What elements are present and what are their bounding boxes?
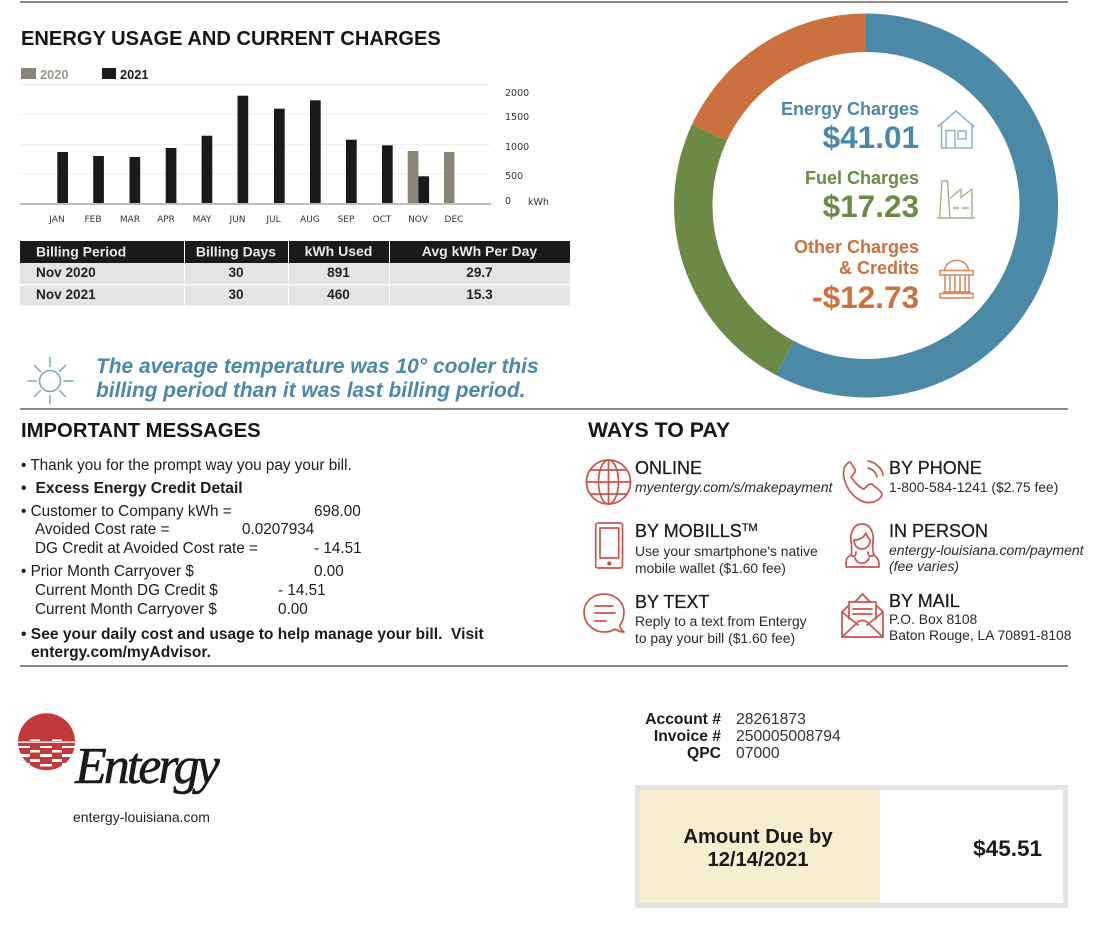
billing table: Avg kWh Per Day	[422, 243, 537, 259]
amount due box	[638, 788, 1066, 906]
fuel charges label: Fuel Charges	[805, 168, 919, 188]
other charges and credits label: & Credits	[839, 258, 919, 278]
pay in person: IN PERSON	[889, 521, 988, 541]
text block: important messages: • See your daily cost and usage to help manage your bill. Visit	[21, 626, 484, 643]
pay by mobills: Use your smartphone's native	[635, 543, 818, 559]
icon: envelope	[842, 594, 883, 637]
billing table: Nov 2021	[36, 287, 96, 302]
pay in person: (fee varies)	[889, 558, 959, 574]
bar chart: monthly kWh: 500	[505, 171, 523, 182]
bar chart: monthly kWh: JUN	[229, 215, 245, 225]
billing table: Billing Days	[196, 244, 276, 260]
icon: globe	[586, 460, 630, 504]
pay in person: entergy-louisiana.com/payment	[889, 542, 1085, 558]
fuel charges label: $17.23	[823, 188, 919, 224]
website url: entergy-louisiana.com	[73, 809, 210, 825]
billing table: 30	[228, 287, 244, 302]
pay online: myentergy.com/s/makepayment	[635, 479, 833, 495]
account details: 07000	[736, 745, 780, 762]
bar chart: monthly kWh: JUL	[265, 215, 281, 225]
entergy logo	[18, 713, 221, 795]
billing table	[20, 241, 570, 306]
bar chart: monthly kWh: FEB	[84, 215, 102, 225]
account details: QPC	[687, 745, 721, 762]
icon: sun	[28, 358, 73, 404]
account details: Account #	[645, 711, 721, 728]
other charges and credits label	[794, 237, 919, 315]
heading: important messages: IMPORTANT MESSAGES	[21, 420, 261, 442]
text block: important messages: Current Month Carryover $	[35, 601, 217, 618]
text block: important messages: 698.00	[314, 503, 361, 520]
text block: important messages: •	[21, 480, 26, 497]
text block: important messages: • Thank you for the prompt way you pay your bill.	[21, 457, 352, 474]
pay by phone: BY PHONE	[889, 458, 982, 478]
bar chart: monthly kWh: 1000	[505, 142, 529, 153]
fuel charges label	[805, 168, 919, 224]
icon: phone	[843, 461, 883, 503]
bar chart: monthly kWh	[20, 84, 549, 225]
billing table: kWh Used	[305, 243, 372, 259]
bar chart: monthly kWh: MAR	[120, 215, 140, 225]
text block: important messages: DG Credit at Avoided Cost rate =	[35, 540, 258, 557]
pay by text: BY TEXT	[635, 592, 709, 612]
billing table: 29.7	[466, 265, 493, 280]
icon: factory	[937, 181, 975, 218]
energy charges label: $41.01	[823, 119, 919, 155]
pay by mobills	[635, 521, 818, 576]
bar chart: monthly kWh: APR	[157, 215, 175, 225]
pay in person	[889, 521, 1085, 574]
icon: bank	[940, 260, 973, 298]
account details	[645, 711, 841, 762]
pay by mail: P.O. Box 8108	[889, 611, 978, 627]
heading: energy usage and current charges: ENERGY USAGE AND CURRENT CHARGES	[21, 28, 441, 50]
icon: speech bubble	[584, 594, 624, 632]
text block: important messages: - 14.51	[314, 540, 362, 557]
bar chart: monthly kWh: DEC	[445, 215, 463, 225]
billing table: 460	[327, 287, 350, 302]
bar chart: monthly kWh: JAN	[48, 215, 65, 225]
bar chart: monthly kWh: MAY	[193, 215, 212, 225]
entergy logo: Entergy	[74, 738, 221, 795]
callout: temperature comparison: billing period than it was last billing period.	[96, 379, 525, 402]
icon: mobile phone	[596, 523, 622, 568]
text block: important messages: 0.00	[278, 601, 308, 618]
bar chart: monthly kWh: NOV	[408, 215, 429, 225]
text block: important messages: Excess Energy Credit Detail	[36, 480, 243, 497]
energy charges label	[781, 99, 919, 155]
pay by mail	[889, 591, 1072, 643]
account details: 250005008794	[736, 728, 841, 745]
callout: temperature comparison: The average temperature was 10° cooler this	[96, 355, 539, 378]
text block: important messages: - 14.51	[278, 582, 326, 599]
text block: important messages: 0.0207934	[242, 521, 315, 538]
pay by mail: Baton Rouge, LA 70891-8108	[889, 627, 1072, 643]
pay by mobills: TM	[742, 522, 758, 534]
billing table: Nov 2020	[36, 265, 96, 280]
bar chart: monthly kWh: OCT	[373, 215, 392, 225]
bar chart: monthly kWh: AUG	[300, 215, 320, 225]
pay by mobills: BY MOBILLS	[635, 521, 742, 541]
pay by phone: 1-800-584-1241 ($2.75 fee)	[889, 479, 1058, 495]
text block: important messages: entergy.com/myAdvisor.	[31, 644, 211, 661]
pay by text: to pay your bill ($1.60 fee)	[635, 630, 795, 646]
text block: important messages: 0.00	[314, 563, 344, 580]
pay by text	[635, 592, 807, 646]
chart legend: 2020	[40, 67, 68, 82]
heading: ways to pay: WAYS TO PAY	[588, 418, 730, 442]
bar chart: monthly kWh: SEP	[338, 215, 355, 225]
bar chart: monthly kWh: 2000	[505, 88, 529, 99]
chart legend	[21, 67, 148, 82]
bar chart: monthly kWh: kWh	[528, 197, 549, 208]
pay by phone	[889, 458, 1058, 495]
account details: Invoice #	[654, 728, 721, 745]
icon: house	[938, 111, 974, 148]
amount due box: Amount Due by	[683, 826, 833, 848]
callout: temperature comparison	[96, 355, 539, 402]
icon: person	[846, 524, 879, 567]
amount due box: $45.51	[973, 836, 1042, 861]
account details: 28261873	[736, 711, 806, 728]
pay online	[635, 458, 833, 495]
other charges and credits label: Other Charges	[794, 237, 919, 257]
billing table: 15.3	[466, 287, 493, 302]
chart legend: 2021	[120, 67, 148, 82]
pay by mail: BY MAIL	[889, 591, 960, 611]
pay by mobills: mobile wallet ($1.60 fee)	[635, 560, 786, 576]
other charges and credits label: -$12.73	[812, 279, 919, 315]
billing table: 30	[228, 265, 244, 280]
pay by text: Reply to a text from Entergy	[635, 613, 807, 629]
billing table: Billing Period	[36, 244, 126, 260]
donut chart: charges breakdown	[674, 13, 1058, 397]
text block: important messages: • Prior Month Carryover $	[21, 563, 194, 580]
text block: important messages	[21, 457, 484, 661]
amount due box: 12/14/2021	[707, 849, 809, 871]
text block: important messages: Current Month DG Credit $	[35, 582, 218, 599]
bar chart: monthly kWh: 0	[505, 196, 511, 207]
billing table: 891	[327, 265, 350, 280]
text block: important messages: • Customer to Company kWh =	[21, 503, 232, 520]
energy charges label: Energy Charges	[781, 99, 919, 119]
bar chart: monthly kWh: 1500	[505, 112, 529, 123]
text block: important messages: Avoided Cost rate =	[35, 521, 170, 538]
pay online: ONLINE	[635, 458, 702, 478]
